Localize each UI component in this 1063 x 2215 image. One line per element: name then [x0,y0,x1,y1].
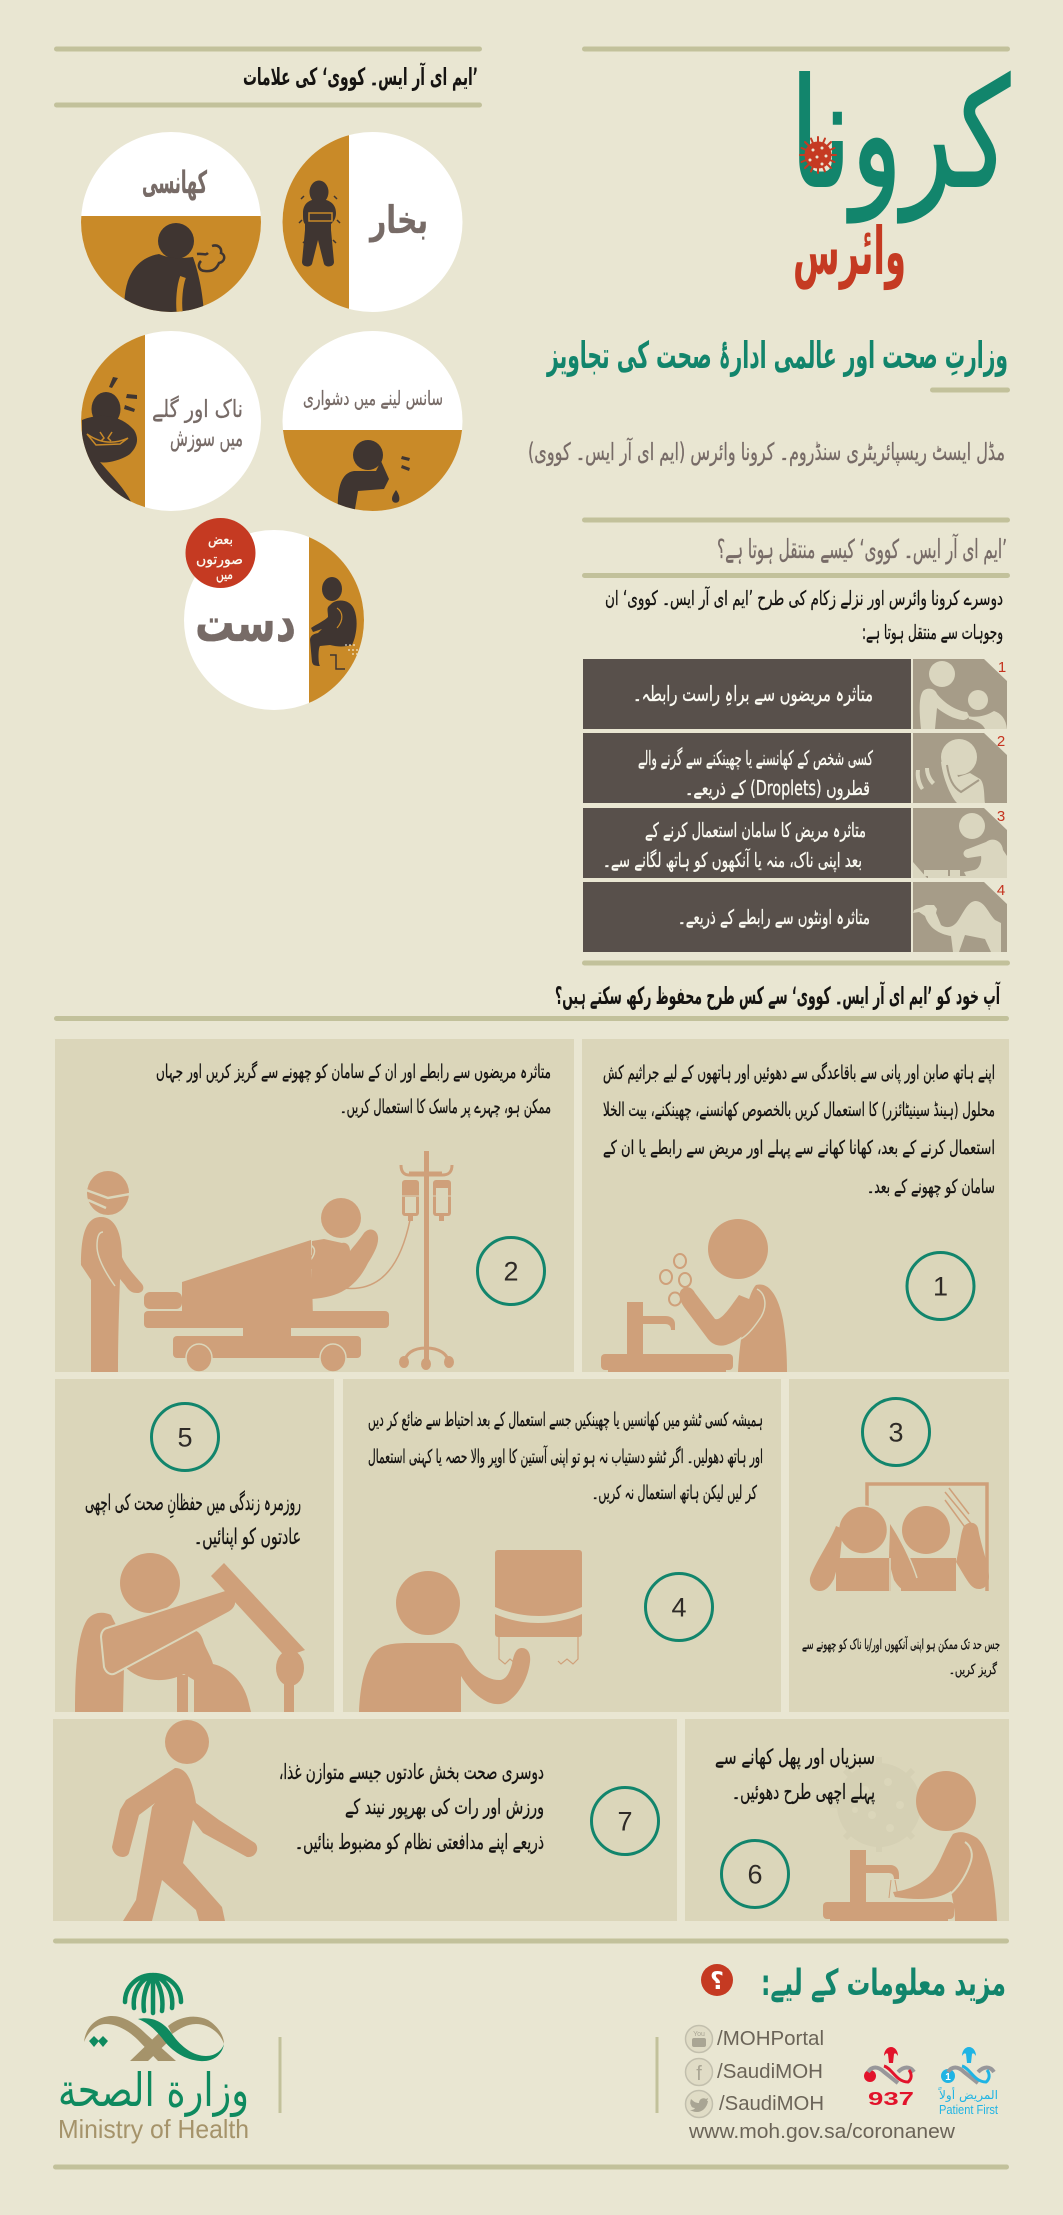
text block: عادتوں کو اپنائیں۔ [194,1525,301,1550]
panel: tip 4 use tissue [343,1379,781,1712]
badge: in some cases: بعض [208,532,233,548]
label: کھانسی [142,165,208,201]
text block: روزمرہ زندگی میں حفظانِ صحت کی اچھی [85,1490,301,1519]
number badge [907,1252,974,1320]
icon: facebook [686,2058,712,2086]
panel: tip 5 good hygiene [55,1379,334,1712]
number badge: 3 [888,1418,904,1448]
icon: figure holding stomach [82,377,137,508]
text block: متاثرہ مریضوں سے رابطے اور ان کے سامان کو چھونے سے گریز کریں اور جہاں [156,1060,551,1083]
symptom: difficulty breathing [280,331,466,515]
icon: sneezing figure [338,440,410,515]
text block: ذریعے اپنے مدافعتی نظام کو مضبوط بنائیں۔ [295,1830,544,1854]
icon: youtube: You [693,2031,705,2038]
icon: virus [800,137,836,173]
text block: سامان کو چھونے کے بعد۔ [867,1176,995,1198]
number badge [646,1574,712,1640]
text block [85,1490,301,1550]
icon: virus watermark [829,1757,927,1852]
symptom: diarrhoea [184,528,369,714]
text block [603,1061,995,1198]
panel: transmission 1 [583,659,1008,729]
number badge: 1 [933,1272,948,1302]
panel: transmission 3 [583,808,1008,878]
icon: person at sink [823,1771,997,1922]
text block: پہلے اچھی طرح دھوئیں۔ [732,1780,875,1804]
panel: transmission 1: متاثرہ مریضوں سے براہِ راست رابطہ۔ [633,682,873,706]
panel: transmission 4 [583,882,1008,952]
panel: transmission 4: متاثرہ اونٹوں سے رابطے کے ذریعے۔ [678,905,870,929]
icon: contact with patient [920,661,1007,729]
icon: question mark: ؟ [710,1967,724,1995]
heading: symptoms: ’ایم ای آر ایس۔ کووی‘ کی علامات [243,62,478,91]
label [152,395,243,452]
text block: ورزش اور رات کی بھرپور نیند کے [345,1795,544,1819]
icon: camel [913,901,1001,952]
icon: palm [125,1975,181,2013]
logo: 937: 937 [868,2089,914,2109]
panel: transmission 1: 1 [998,659,1006,676]
text block [368,1409,763,1504]
icon: youtube [686,2026,712,2052]
icon: twitter [686,2090,712,2118]
panel: tip 1 wash hands [582,1039,1009,1374]
panel: transmission 3: 3 [997,808,1005,825]
text block [156,1060,551,1118]
label: بخار [369,198,428,242]
icon: crossed swoosh [84,2016,224,2061]
social links [686,2026,956,2143]
icon: facebook: f [696,2063,702,2085]
label: ناک اور گلے [152,395,243,423]
panel: transmission 2: کسی شخص کے کھانسنے یا چھینکنے سے گرنے والے [638,746,873,770]
panel: transmission 3: بعد اپنی ناک، منہ یا آنکھوں کو ہاتھ لگانے سے۔ [603,847,862,873]
text block: سبزیاں اور پھل کھانے سے [715,1745,875,1769]
logo: patient first: 1 [945,2072,951,2083]
text block: دوسری صحت بخش عادتوں جیسے متوازن غذا، [279,1760,544,1784]
handle: /SaudiMOH [719,2093,824,2115]
text block: گریز کریں۔ [949,1661,997,1678]
panel: tip 2 avoid contact, wear mask [55,1039,574,1372]
text block: ہمیشہ کسی ٹشو میں کھانسیں یا چھینکیں جسے استعمال کے بعد احتیاط سے ضائع کر دیں [368,1409,763,1431]
text block: transmission intro [605,585,1003,644]
icon: person at tissue dispenser [359,1550,582,1712]
panel: transmission 4: 4 [997,882,1005,899]
number badge [592,1788,658,1854]
logo: 937 [864,2047,914,2109]
panel: tip 7 healthy habits [53,1719,677,1921]
title word: virus: وائرس [793,213,906,291]
icon: touching objects [913,813,1007,878]
logo: patient first [938,2047,998,2117]
number badge [152,1404,218,1470]
label: دست [195,591,296,654]
logo: patient first: Patient First [939,2102,998,2117]
number badge [722,1840,788,1908]
website: www.moh.gov.sa/coronanew [688,2121,956,2143]
icon: walking person [112,1720,257,1921]
number badge: 4 [671,1592,687,1622]
badge: in some cases: صورتوں [196,552,243,568]
arabic name: وزارة الصحة [58,2063,249,2118]
icon: person at mirror [810,1484,989,1591]
icon: shivering figure [302,180,336,266]
badge: in some cases [186,518,256,588]
text block [279,1760,544,1854]
english name: Ministry of Health [58,2114,249,2144]
text block: کر لیں لیکن ہاتھ استعمال نہ کریں۔ [592,1482,758,1504]
number badge: 5 [177,1422,193,1452]
panel: transmission 2: 2 [997,733,1005,750]
icon: person washing hands [601,1219,787,1374]
panel: tip 6 wash vegetables [685,1719,1009,1922]
text block: اور ہاتھ دھولیں۔ اگر ٹشو دستیاب نہ ہو تو اپنی آستین کا اوپر والا حصہ یا کہنی استعمال [368,1444,763,1468]
badge: in some cases: میں [216,567,233,583]
panel: transmission 2: قطروں (Droplets) کے ذریعے۔ [685,776,870,800]
icon: seated figure [310,577,358,669]
number badge [862,1398,930,1466]
number badge: 2 [503,1256,519,1286]
icon: question mark [701,1964,733,1996]
number badge: 6 [747,1860,763,1890]
logo: patient first: المريض أولاً [938,2087,998,2103]
panel: tip 3 avoid touching face [789,1379,1009,1712]
handle: /SaudiMOH [717,2061,823,2083]
symptom: nose and throat irritation [78,328,261,514]
panel: transmission 2 [583,733,1008,803]
icon: person covering with elbow [75,1553,305,1712]
number badge [478,1238,544,1304]
icon: coughing droplets [916,739,985,803]
title: corona virus [790,48,1010,291]
icon: coughing figure [124,223,224,315]
text block [802,1636,1000,1678]
icon: doctor and patient on bed [81,1151,454,1372]
label: میں سوزش [170,424,243,452]
text block: ممکن ہو، چہرے پر ماسک کا استعمال کریں۔ [340,1096,551,1118]
symptom: fever [280,130,462,314]
panel: transmission 3: متاثرہ مریض کا سامان استعمال کرنے کے [645,818,866,842]
handle: /MOHPortal [717,2028,824,2050]
number badge: 7 [617,1806,633,1836]
label: سانس لینے میں دشواری [303,386,443,410]
logo: ministry of health [58,1975,249,2144]
symptom: cough [78,132,264,316]
text block [715,1745,875,1804]
